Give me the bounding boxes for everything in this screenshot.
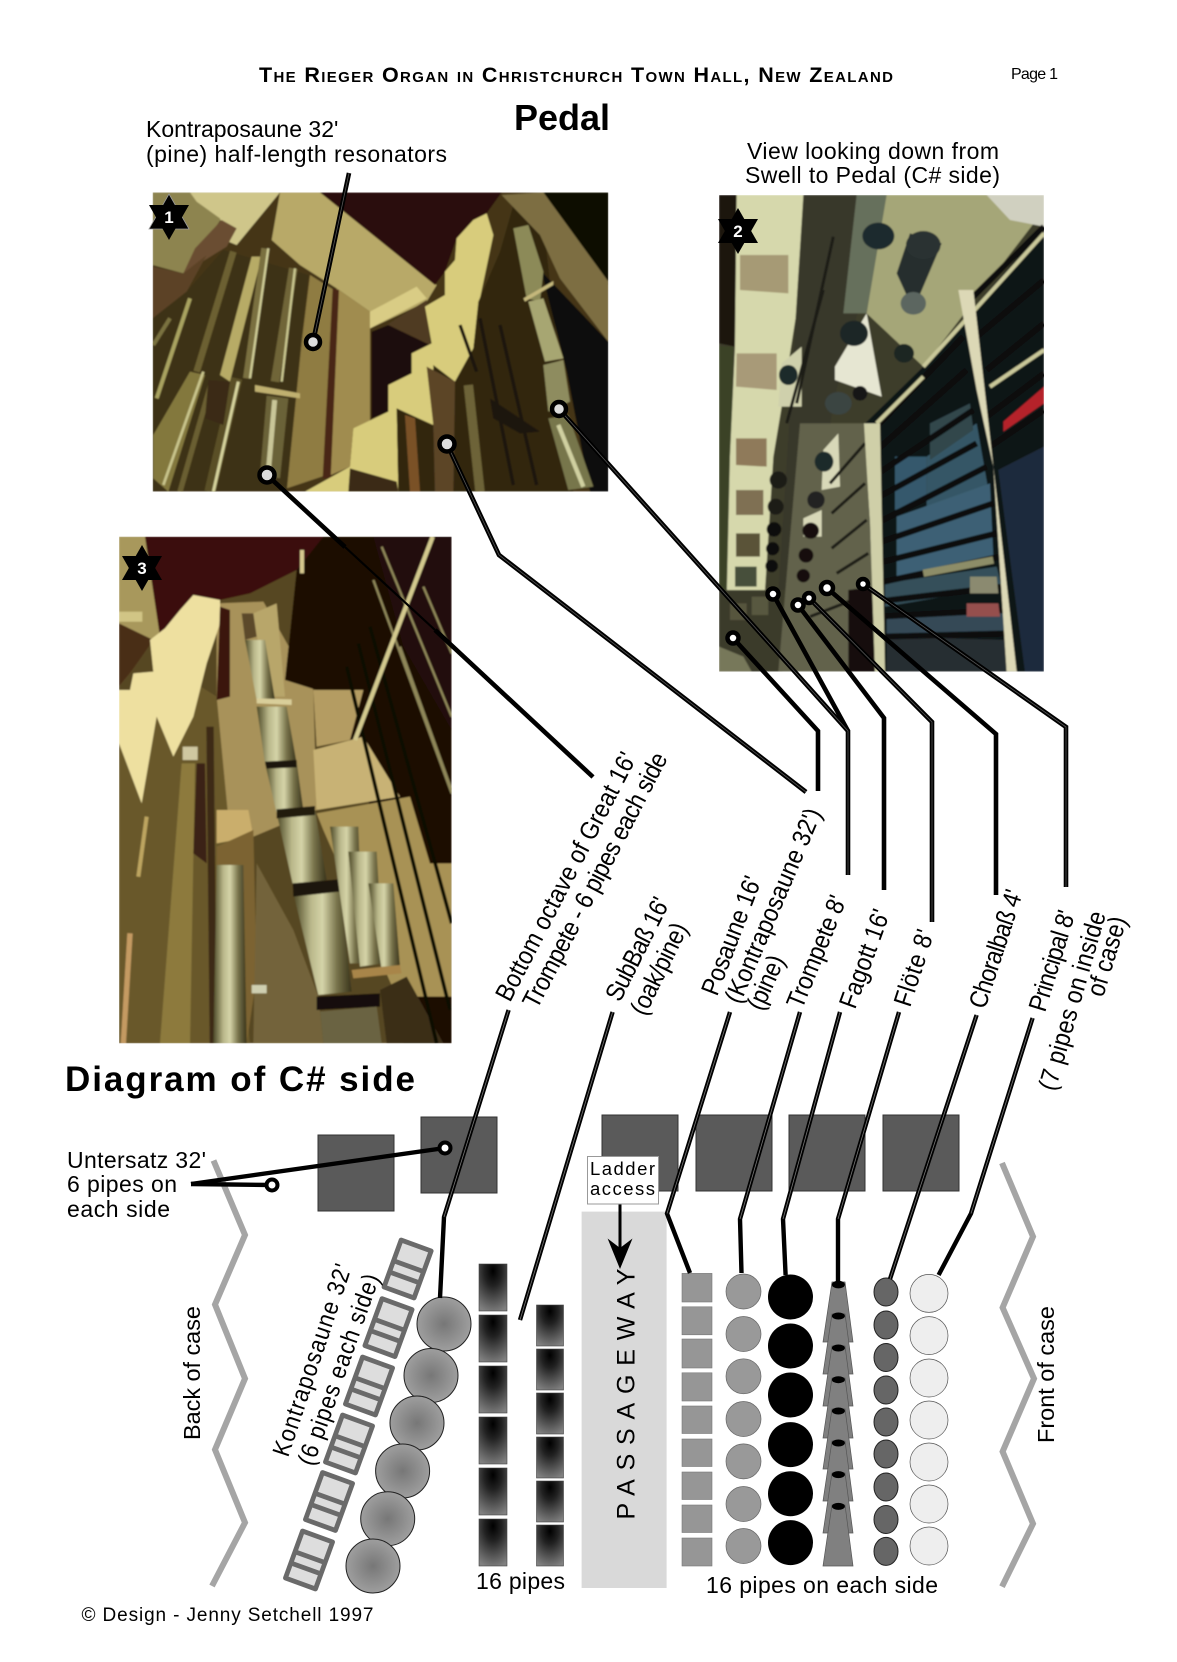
heading: Diagram of C# side: Diagram of C# side [65,1060,415,1099]
star badge 2 [718,208,758,254]
label: Kontraposaune resonators: (pine) half-length resonators [146,141,447,167]
Trompete 8' pipes [726,1274,761,1564]
label: 16 pipes on each side: 16 pipes on each side [706,1572,938,1598]
rotated stop labels [490,748,1133,1094]
star badge 3 [122,545,162,591]
ladder access box: Ladder [590,1158,655,1179]
rotated stop labels: Bottom octave of Great 16' [490,748,643,1006]
passageway text: PASSAGEWAY [612,1268,640,1520]
star badge 1: 1 [164,208,174,227]
label: Untersatz 32': each side [67,1196,170,1222]
ladder access box: access [590,1178,655,1199]
SubBass pipes, column 2 [536,1305,564,1566]
SubBass pipes, column 1 [479,1264,507,1566]
page number: Page 1 [1011,66,1058,83]
rotated stop labels: SubBaß 16' [600,893,676,1006]
photo 3 [119,537,452,1043]
callout dots [260,335,868,644]
callout lines to diagram [191,1010,1033,1320]
label: Untersatz 32': Untersatz 32' [67,1147,206,1173]
rotated stop labels: Principal 8' [1024,907,1081,1015]
label: Untersatz 32': 6 pipes on [67,1171,177,1197]
label: view looking down: View looking down from [747,138,999,164]
title: The Rieger Organ in Christchurch Town Hall, New Zealand [259,63,893,87]
Choralbass pipes [874,1278,898,1565]
callout lines from upper photos to labels [267,173,1066,922]
Untersatz callout dots [266,1142,450,1190]
label: 16 pipes: 16 pipes [476,1568,565,1594]
heading: Pedal: Pedal [514,97,610,138]
Posaune square pipes [682,1273,712,1566]
Floete conical pipes [823,1281,853,1566]
arrow: ladder access [608,1204,632,1269]
case outline: back [212,1160,245,1586]
rotated stop labels: of case) [1082,913,1133,1000]
star badge 1 [149,194,189,240]
rotated stop labels: (7 pipes on inside [1034,908,1112,1094]
label: Kontraposaune 32' six pipes: Kontraposaune 32' [267,1260,357,1460]
rotated stop labels: Fagott 16' [834,906,896,1012]
rotated stop labels: Flöte 8' [889,926,940,1010]
copyright: © Design - Jenny Setchell 1997 [82,1605,374,1626]
Fagott pipes [768,1274,813,1565]
star badge 3: 3 [137,559,147,578]
Untersatz blocks [318,1115,959,1211]
rotated stop labels: Trompete 8' [781,891,853,1012]
label: front of case: Front of case [1033,1306,1059,1443]
star badge 2: 2 [733,222,743,241]
rotated stop labels: Choralbaß 4' [964,886,1029,1012]
Kontraposaune resonator boxes [285,1240,431,1589]
rotated stop labels: (pine) [742,951,791,1015]
photo 2 [719,195,1044,672]
Kontraposaune pipes [346,1297,471,1593]
label: Kontraposaune resonators: Kontraposaune 32' [146,116,338,142]
label: view looking down: Swell to Pedal (C# side) [745,162,1000,188]
passageway [582,1212,667,1588]
rotated stop labels: (oak/pine) [625,918,694,1020]
ladder access box [588,1156,658,1204]
case outline: front [1002,1163,1034,1587]
photo 1 [153,192,608,492]
label: Kontraposaune 32' six pipes: (6 pipes each side) [292,1270,385,1469]
Principal pipes [910,1274,948,1565]
rotated stop labels: Trompete - 6 pipes each side [517,748,674,1013]
rotated stop labels: (Kontraposaune 32') [720,804,828,1007]
label: back of case: Back of case [179,1306,205,1440]
rotated stop labels: Posaune 16' [696,872,768,999]
